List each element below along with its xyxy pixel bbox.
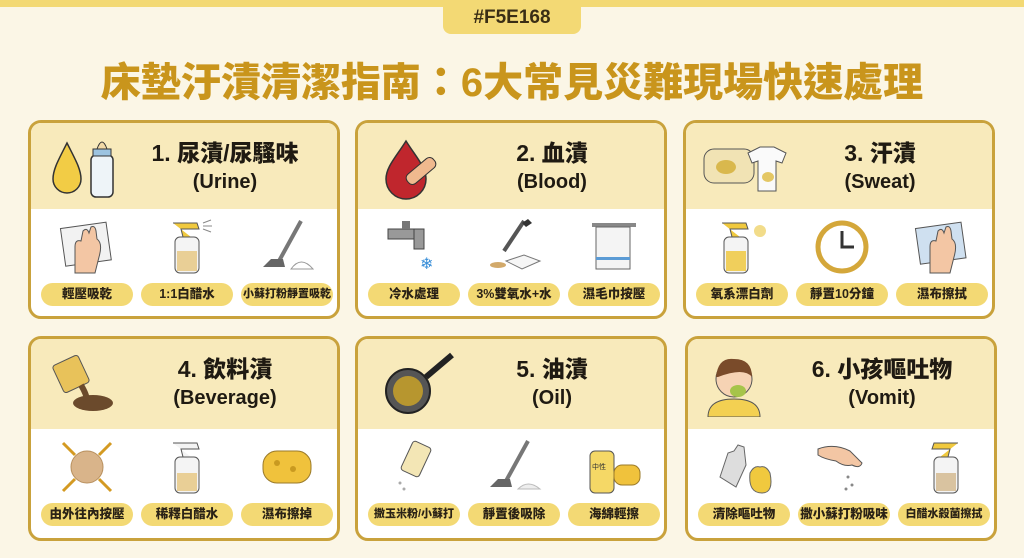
- header: beverage: 4. 飲料漬: [178, 356, 272, 382]
- icon: sick child: [708, 358, 760, 417]
- step: cold water: [368, 221, 460, 306]
- step: wait 10 min: [796, 220, 888, 306]
- header: oil: [358, 339, 664, 429]
- step: press outside in: 由外往內按壓: [49, 507, 124, 521]
- step: vinegar: [141, 220, 233, 306]
- header: oil: 5. 油漬: [516, 356, 588, 382]
- title: 床墊汙漬清潔指南：6大常見災難現場快速處理: [101, 61, 923, 105]
- header: vomit: 6. 小孩嘔吐物: [812, 356, 952, 382]
- step: wet towel: [568, 223, 660, 306]
- step: diluted vinegar: 稀釋白醋水: [156, 507, 218, 521]
- step: cold water: 冷水處理: [389, 287, 439, 301]
- header: urine: [31, 123, 337, 209]
- step: wet towel: 濕毛巾按壓: [583, 287, 645, 301]
- step: detergent sponge: 中性: [592, 462, 606, 471]
- icon: drop and bottle: [52, 142, 114, 198]
- icon: spilled cup: [52, 355, 113, 411]
- panel: urine: [28, 120, 340, 319]
- header: sweat: 3. 汗漬: [844, 140, 916, 166]
- header: vomit: (Vomit): [848, 387, 916, 409]
- panel: beverage: [28, 336, 340, 541]
- header: blood: [358, 123, 664, 209]
- icon: blood drop with bandage: [385, 140, 436, 200]
- header: urine: (Urine): [193, 171, 257, 193]
- step: oxygen bleach: 氧系漂白劑: [711, 287, 773, 301]
- step: sponge: 濕布擦掉: [262, 507, 312, 521]
- step: detergent sponge: 海綿輕擦: [589, 507, 639, 521]
- step: vinegar: 1:1白醋水: [159, 287, 215, 301]
- panel: vomit: [685, 336, 997, 541]
- header: sweat: [686, 123, 992, 209]
- header: beverage: [31, 339, 337, 429]
- step: wipe: 濕布擦拭: [917, 287, 967, 301]
- step: press outside in: [41, 442, 133, 526]
- step: remove vomit: 清除嘔吐物: [713, 507, 775, 521]
- panel: sweat: [683, 120, 995, 319]
- step: diluted vinegar: [141, 442, 233, 526]
- step: remove vomit: [698, 444, 790, 526]
- icon: pillow and shirt: [704, 146, 787, 192]
- step: baking soda: 小蘇打粉靜置吸乾: [243, 288, 331, 300]
- header: beverage: (Beverage): [173, 387, 277, 409]
- step: peroxide: [468, 219, 560, 306]
- panel: oil: [355, 336, 667, 541]
- step: press dry: [41, 222, 133, 306]
- tag: color code: #F5E168: [473, 7, 551, 28]
- step: oxygen bleach: [696, 222, 788, 306]
- step: vinegar disinfect: 白醋水殺菌擦拭: [906, 508, 982, 520]
- header: urine: 1. 尿漬/尿騷味: [152, 140, 298, 166]
- step: baking soda sprinkle: 撒小蘇打粉吸味: [800, 507, 888, 521]
- step: vinegar disinfect: [898, 442, 990, 526]
- panel: blood: [355, 120, 667, 319]
- header: blood: 2. 血漬: [516, 140, 588, 166]
- header: sweat: (Sweat): [844, 171, 916, 193]
- step: peroxide: 3%雙氧水+水: [476, 287, 552, 301]
- step: vacuum: 靜置後吸除: [483, 507, 545, 521]
- step: cornstarch: [368, 440, 460, 526]
- step: sponge: [241, 450, 333, 526]
- step: press dry: 輕壓吸乾: [62, 287, 112, 301]
- step: baking soda sprinkle: [798, 446, 890, 526]
- step: baking soda: [241, 220, 333, 306]
- icon: frying pan: [385, 352, 454, 414]
- step: wipe: [896, 222, 988, 306]
- step: wait 10 min: 靜置10分鐘: [810, 287, 874, 301]
- step: cold water: ❄: [420, 256, 433, 273]
- tag: color code: [443, 0, 581, 34]
- step: vacuum: [468, 440, 560, 526]
- header: oil: (Oil): [532, 387, 572, 409]
- step: detergent sponge: [568, 450, 660, 526]
- header: blood: (Blood): [517, 171, 587, 193]
- step: cornstarch: 撒玉米粉/小蘇打: [374, 508, 454, 520]
- header: vomit: [688, 339, 994, 429]
